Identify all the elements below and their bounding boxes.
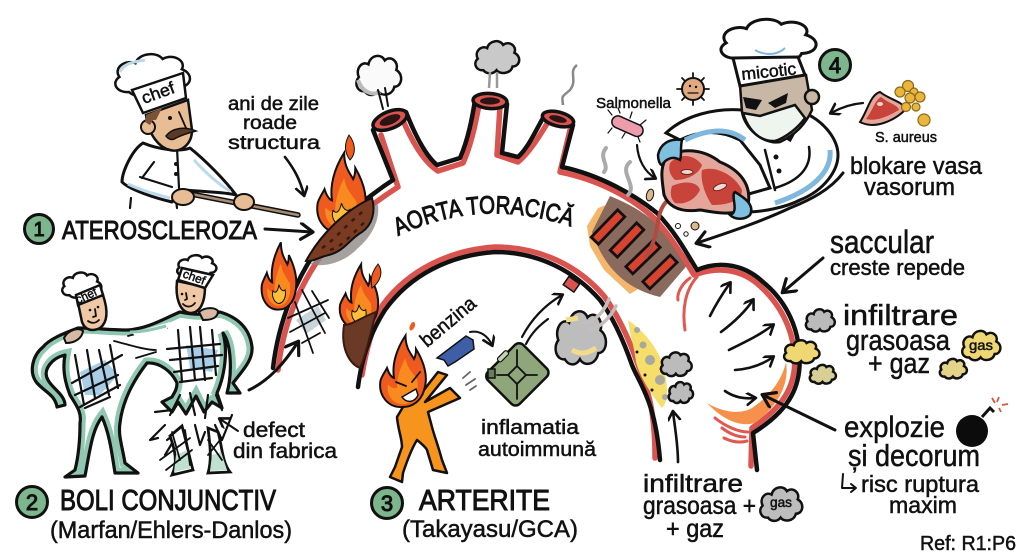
drip of blood xyxy=(645,200,668,258)
s aureus label: S. aureus xyxy=(875,129,937,146)
panel: ateroscleroza xyxy=(24,54,378,265)
note: infiltrare bottom xyxy=(643,470,756,543)
flame inner arch xyxy=(340,264,378,329)
bacterium xyxy=(608,108,646,142)
ember drop xyxy=(371,264,381,288)
yellow cocci xyxy=(895,80,930,126)
left chef head xyxy=(62,272,106,343)
grill bars xyxy=(591,210,677,289)
virus xyxy=(677,73,709,105)
badge 3: 3 xyxy=(381,491,393,516)
arrow to plaque xyxy=(285,157,304,195)
sub heading marfan: (Marfan/Ehlers-Danlos) xyxy=(50,517,292,544)
stretched mesh between xyxy=(114,328,167,358)
badge 2 xyxy=(16,486,48,518)
tear marks xyxy=(150,393,232,455)
note: infiltrare bottom: infiltrare xyxy=(643,470,743,498)
note: infiltrare bottom: grasoasa + xyxy=(643,492,756,520)
flame left of aorta xyxy=(262,242,296,310)
gas cloud bottom xyxy=(760,487,802,521)
right mesh xyxy=(186,345,218,372)
gas cloud bottom: gas xyxy=(770,494,792,510)
badge 3 xyxy=(372,488,402,518)
badge 1: 1 xyxy=(33,219,45,241)
fat infiltration inner wall xyxy=(628,320,668,408)
torn legs xyxy=(160,426,230,475)
arrow to wall net xyxy=(249,342,298,390)
pressure arrows xyxy=(710,283,773,398)
splash xyxy=(463,372,476,390)
mouths of branch vessels xyxy=(370,92,575,135)
gas cloud yellow xyxy=(962,331,1000,360)
plaque xyxy=(306,198,378,265)
big steak xyxy=(662,151,749,213)
heading boli conjunctiv: BOLI CONJUNCTIV xyxy=(60,485,277,517)
explozie label: și decorum xyxy=(848,438,980,473)
explozie label: explozie xyxy=(844,411,945,444)
clouds on wall xyxy=(784,309,836,384)
arrow up to fat xyxy=(673,412,678,462)
sub heading takayasu: (Takayasu/GCA) xyxy=(402,516,578,543)
note: defect din fabrica: din fabrica xyxy=(233,440,337,463)
micotic coat xyxy=(666,110,838,212)
bottle arrow xyxy=(470,332,492,345)
torn wall wisps xyxy=(678,277,748,442)
salmonella arrow xyxy=(637,145,655,178)
orange inflamed wall xyxy=(707,362,787,424)
tab on wall xyxy=(563,276,580,292)
arrow heading to plaque xyxy=(265,229,312,232)
clouds near fat xyxy=(661,352,692,376)
note: inflamatia autoimmuna: autoimmună xyxy=(478,439,597,461)
micotic head and mask xyxy=(721,19,819,142)
steam wisps xyxy=(603,148,631,195)
panel: vasa vasorum grill xyxy=(591,148,699,289)
crumbs xyxy=(645,188,699,236)
badge 4: 4 xyxy=(829,53,841,78)
left chef head: chef xyxy=(73,284,100,307)
note: defect din fabrica xyxy=(220,419,337,463)
vasorum label: vasorum xyxy=(864,174,955,201)
aorta label xyxy=(398,213,572,236)
note: ani de zile xyxy=(228,94,321,154)
note: ani de zile: ani de zile xyxy=(228,94,319,115)
salmonella label: Salmonella xyxy=(596,95,672,112)
infiltrare label xyxy=(843,300,958,380)
aorta red wall xyxy=(278,105,795,466)
jerrycan xyxy=(484,341,551,408)
vasorum label: blokare vasa xyxy=(850,153,983,180)
grill block behind wall xyxy=(587,196,690,297)
explozie label xyxy=(842,411,980,518)
text: AORTA TORACICĂ xyxy=(396,196,575,237)
flame character xyxy=(380,322,460,482)
saccular arrow xyxy=(783,258,823,292)
micotic head and mask: micotic xyxy=(740,59,798,84)
vasorum label xyxy=(850,153,983,201)
right chef head xyxy=(177,255,218,320)
heading ateroscleroza: ATEROSCLEROZA xyxy=(62,215,258,245)
panel: micotic chef xyxy=(596,19,983,243)
note: benzina: benzina xyxy=(416,292,481,352)
weak wall net xyxy=(288,290,329,353)
reference note: Ref: R1:P6 xyxy=(920,533,1016,555)
left mesh xyxy=(80,360,118,395)
vasorum arrow xyxy=(697,173,843,243)
flame on plaque xyxy=(317,153,366,233)
explosion arrow xyxy=(763,395,835,430)
explozie label: risc ruptura xyxy=(861,471,979,497)
note: ani de zile: roade xyxy=(243,113,297,134)
smoke cloud middle vessel xyxy=(475,41,519,88)
inflammation cloud xyxy=(556,299,616,364)
panel: arterite xyxy=(372,276,616,543)
badge 1 xyxy=(24,214,54,244)
saccular label: saccular xyxy=(830,224,934,260)
gas cloud yellow: gas xyxy=(969,337,993,353)
note: inflamatia autoimmuna: inflamatia xyxy=(481,417,580,439)
infiltrare label: infiltrare xyxy=(843,300,958,332)
ember drop top xyxy=(345,135,354,160)
smoke cloud left vessel xyxy=(356,56,401,109)
note: defect din fabrica: defect xyxy=(243,419,305,442)
inner plaque xyxy=(343,312,376,368)
aorta black outline xyxy=(273,100,800,470)
note: inflamatia autoimmuna xyxy=(478,417,597,461)
right chef head: chef xyxy=(181,267,208,288)
infiltrare label: + gaz xyxy=(868,348,930,380)
badge 2: 2 xyxy=(26,490,38,515)
gloves xyxy=(658,140,751,219)
smoke wisp right vessel xyxy=(562,65,577,105)
badge 4 xyxy=(820,50,850,80)
small steak xyxy=(860,92,905,125)
saccular label: creste repede xyxy=(830,255,965,280)
explozie label: maxim xyxy=(889,492,957,518)
chef 1 xyxy=(115,54,298,215)
heading arterite: ARTERITE xyxy=(419,485,550,517)
arrows up xyxy=(522,295,562,344)
note: infiltrare bottom: + gaz xyxy=(666,515,724,543)
chef 1: chef xyxy=(139,78,178,108)
arrow s aureus xyxy=(831,103,863,113)
bomb icon xyxy=(956,397,1008,447)
fuel bottle xyxy=(437,336,474,366)
panel: saccular aneurysm xyxy=(678,224,1008,518)
second cloud near fat xyxy=(669,382,693,403)
aorta arch xyxy=(273,92,800,470)
saccular label xyxy=(830,224,965,280)
chef suits body xyxy=(32,312,252,477)
small gas cloud xyxy=(940,359,967,378)
infiltrare label: grasoasa xyxy=(846,325,951,357)
panel: boli conjunctiv xyxy=(16,255,337,544)
note: ani de zile: structura xyxy=(228,133,321,154)
